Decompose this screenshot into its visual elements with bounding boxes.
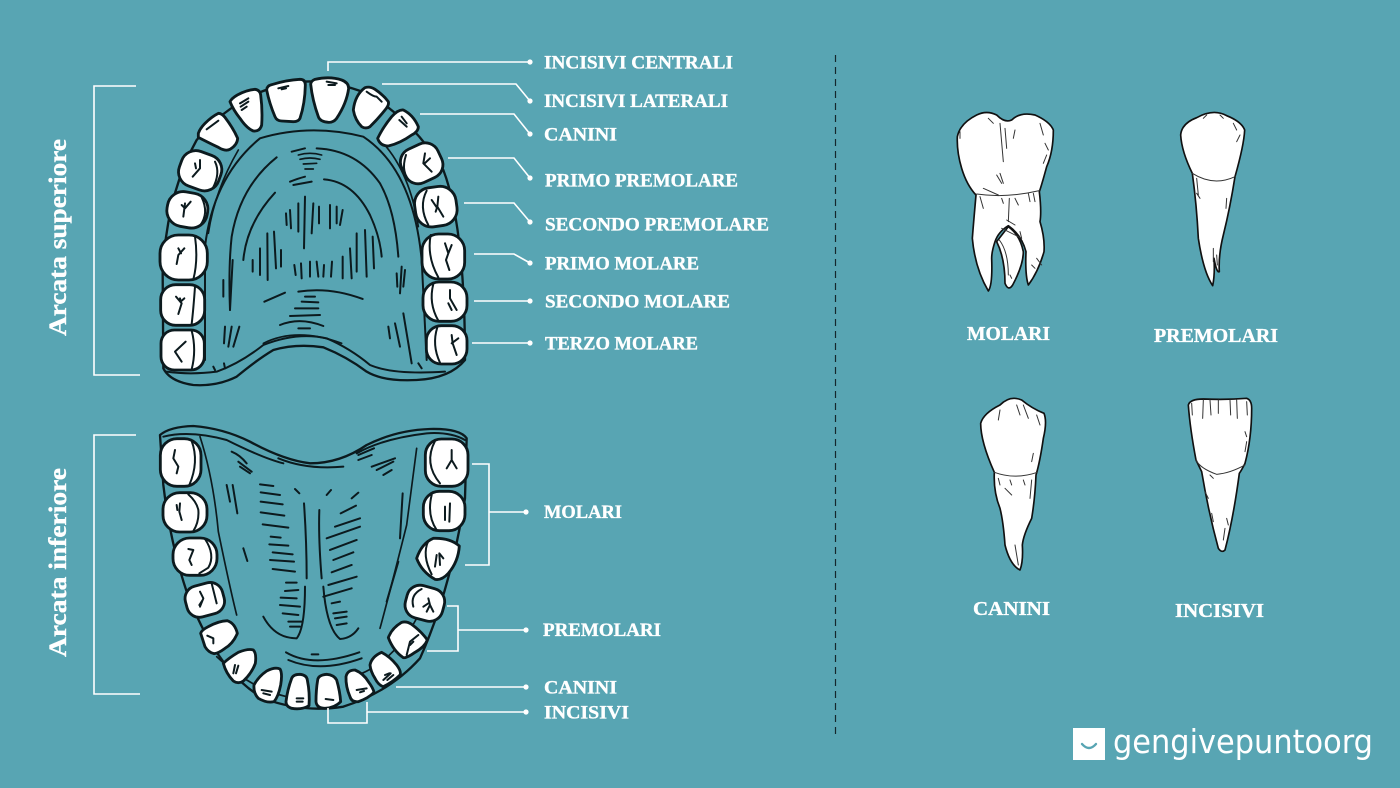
lower molar 1 right	[417, 538, 459, 580]
molar 1 right	[422, 234, 465, 279]
canine outline	[981, 398, 1046, 570]
bracket: arcata superiore	[94, 86, 140, 375]
connector: molari	[465, 464, 529, 565]
label: terzo molare: TERZO MOLARE	[545, 334, 698, 354]
panel: premolar tooth	[1181, 112, 1245, 286]
label: primo premolare: PRIMO PREMOLARE	[545, 170, 738, 192]
label: secondo molare: SECONDO MOLARE	[545, 292, 730, 312]
molar 2 right	[423, 282, 467, 321]
lower lateral incisor right	[346, 670, 374, 702]
label: secondo premolare: SECONDO PREMOLARE	[545, 214, 769, 236]
connector: secondo molare	[474, 298, 533, 304]
premolar 2 right	[412, 184, 459, 229]
lower molar 3 right	[425, 439, 468, 486]
heading: arcata superiore: Arcata superiore	[45, 139, 72, 336]
lower premolar 2 right	[402, 582, 448, 624]
panel: molar tooth	[957, 112, 1053, 291]
labels: upper arch	[328, 52, 769, 354]
incisor central right	[311, 78, 349, 122]
icon: smiling square	[1073, 728, 1105, 760]
label: molari lower: MOLARI	[544, 502, 622, 523]
connector: canini lower	[396, 684, 529, 690]
label: canini: CANINI	[973, 598, 1050, 620]
upper tooth surface marks	[175, 82, 458, 369]
logo: gengivepuntoorg	[1073, 722, 1373, 761]
label: canini lower: CANINI	[544, 678, 617, 698]
connector: incisivi laterali	[382, 84, 533, 104]
tongue detail lines	[163, 433, 465, 697]
lower central incisor left	[286, 674, 309, 709]
incisor lateral left	[230, 89, 262, 131]
incisor outline	[1188, 398, 1252, 551]
label: incisivi laterali: INCISIVI LATERALI	[544, 91, 728, 112]
lower molar 1 left	[173, 538, 217, 575]
premolar shading	[1192, 115, 1240, 265]
lower premolar 1 right	[388, 622, 427, 658]
panel: lower arch illustration	[160, 426, 468, 709]
lower central incisor right	[316, 674, 341, 708]
molar 3 left	[161, 330, 204, 370]
molar middle root	[997, 227, 1023, 288]
lower canine left	[223, 650, 256, 683]
connector: terzo molare	[472, 340, 533, 346]
connector: primo molare	[474, 254, 533, 266]
logo wordmark: gengivepuntoorg	[1113, 722, 1373, 761]
labels: lower arch	[328, 464, 661, 724]
connector: incisivi centrali	[328, 59, 533, 71]
label: primo molare: PRIMO MOLARE	[545, 254, 699, 274]
premolar 1 right	[396, 138, 448, 188]
premolar 2 left	[164, 189, 210, 231]
lower gum and tongue	[160, 426, 467, 709]
molar outline	[957, 112, 1053, 291]
label: premolari lower: PREMOLARI	[543, 620, 661, 641]
label: incisivi centrali: INCISIVI CENTRALI	[544, 52, 733, 74]
lower lateral incisor left	[254, 668, 282, 702]
molar shading	[960, 118, 1048, 278]
lower molar 3 left	[160, 439, 201, 486]
canine right	[378, 110, 418, 146]
dashed divider	[834, 55, 836, 735]
label: canini: CANINI	[544, 124, 617, 146]
premolar 1 left	[174, 146, 226, 195]
label: incisivi: INCISIVI	[1175, 600, 1264, 622]
label: premolari: PREMOLARI	[1154, 325, 1278, 347]
lower canine right	[370, 652, 400, 687]
lower tooth surface marks	[173, 441, 457, 702]
incisor central left	[267, 79, 305, 122]
upper gum and palate	[163, 81, 465, 385]
heading: arcata inferiore: Arcata inferiore	[45, 468, 72, 657]
lower molar 2 right	[423, 491, 465, 531]
lower premolar 2 left	[182, 580, 227, 620]
connector: premolari	[427, 606, 529, 651]
connector: canini	[420, 114, 533, 137]
canine shading	[994, 405, 1040, 565]
molar 1 left	[160, 235, 207, 280]
panel: canine tooth	[981, 398, 1046, 570]
panel: upper arch illustration	[160, 78, 467, 385]
premolar outline	[1181, 112, 1245, 286]
incisor shading	[1192, 400, 1247, 540]
panel: incisor tooth	[1188, 398, 1252, 551]
molar 2 left	[161, 285, 205, 325]
molar 3 right	[426, 326, 467, 364]
label: molari: MOLARI	[967, 323, 1050, 345]
connector: incisivi lower	[328, 702, 529, 723]
lower molar 2 left	[163, 493, 207, 532]
connector: primo premolare	[448, 158, 533, 181]
palate detail lines	[167, 130, 445, 373]
canine left	[198, 113, 238, 150]
label: incisivi lower: INCISIVI	[544, 702, 629, 724]
lower premolar 1 left	[201, 621, 237, 654]
incisor lateral right	[353, 87, 389, 128]
connector: secondo premolare	[464, 203, 533, 225]
bracket: arcata inferiore	[94, 435, 140, 694]
